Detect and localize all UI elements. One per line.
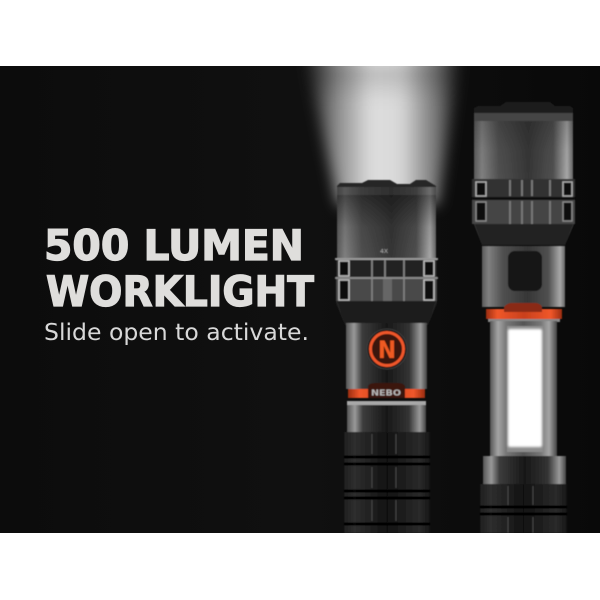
front collar (347, 401, 426, 433)
worklight COB panel (507, 326, 543, 452)
front body (346, 323, 427, 389)
headline line 2: WORKLIGHT (46, 267, 314, 316)
flashlight: front view with logo (335, 180, 438, 533)
front head: 4X (380, 249, 389, 255)
headline line 1: 500 LUMEN (44, 221, 304, 270)
orange N logo button (367, 329, 407, 369)
side rubber grip (480, 484, 567, 533)
headline (46, 228, 314, 308)
orange NEBO band (348, 383, 425, 398)
front head (337, 180, 436, 259)
subheading: Slide open to activate. (44, 320, 309, 346)
sliding tube (490, 321, 557, 456)
side base collar (483, 456, 566, 484)
light beam (304, 50, 462, 205)
side head (474, 102, 573, 179)
flashlight: side view with worklight open (472, 102, 575, 533)
front knurled ring (335, 258, 438, 325)
infographic canvas (0, 66, 600, 533)
front rubber grip (344, 432, 430, 533)
side orange band (486, 303, 562, 322)
orange NEBO band: NEBO (371, 388, 401, 398)
orange N logo button: N (378, 336, 396, 364)
side knurled ring (472, 179, 575, 245)
side body with window (482, 246, 565, 307)
